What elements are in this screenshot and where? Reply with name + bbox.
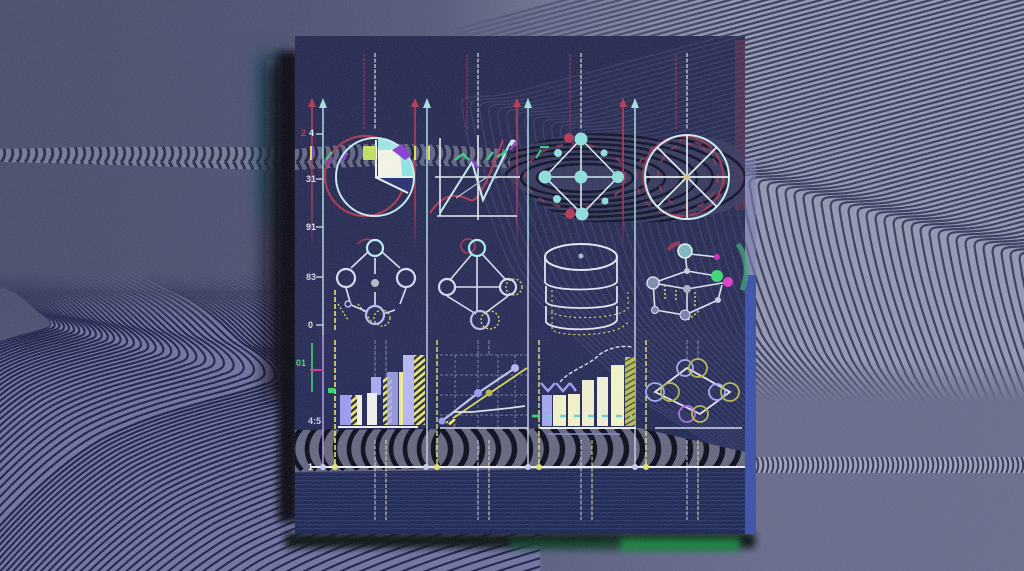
- axis labels: 4: [309, 128, 314, 138]
- moire band across lens in upper board: [500, 133, 745, 222]
- axis labels: 1: [308, 462, 313, 472]
- moire band: upper left: [0, 147, 295, 171]
- tick marks on axis: [316, 134, 323, 325]
- axis labels: 0: [308, 320, 313, 330]
- wheel chart: [643, 135, 729, 219]
- axis labels: 83: [306, 272, 316, 282]
- axis labels: 4:5: [308, 416, 321, 426]
- network diagram: mixed colour nodes: [647, 243, 746, 320]
- bar chart: left: [338, 355, 425, 427]
- network diagram: pentagon: [337, 239, 415, 326]
- axis labels: 91: [306, 222, 316, 232]
- wavy moire lines: left: [0, 280, 540, 571]
- glitch marks: coloured axes: [310, 290, 646, 467]
- network diagram: chained rings: [646, 359, 742, 428]
- canvas board: [295, 36, 756, 534]
- axis labels: 2: [301, 128, 306, 138]
- wavy moire lines: right: [484, 0, 1024, 396]
- board shadow: [258, 50, 755, 551]
- moire band across lower board: [295, 428, 745, 472]
- pie chart: [311, 136, 429, 216]
- database cylinder: [545, 244, 628, 335]
- moire band across upper-left board: [295, 144, 510, 170]
- moire band: lower right: [755, 457, 1024, 473]
- axis labels: 01: [296, 358, 306, 368]
- cyan axes with arrows: [319, 98, 639, 467]
- line chart: [430, 135, 520, 220]
- axis labels: 31: [306, 174, 316, 184]
- horizontal base axis with nodes: [310, 464, 745, 470]
- bar chart: right: [532, 346, 636, 434]
- grid line chart: [438, 355, 528, 428]
- network diagram: diamond with cyan nodes: [536, 132, 624, 220]
- axis labels: [296, 128, 321, 472]
- red ghost axes: [308, 54, 676, 250]
- dashed guide lines: [375, 53, 698, 520]
- network diagram: kite: [439, 239, 522, 329]
